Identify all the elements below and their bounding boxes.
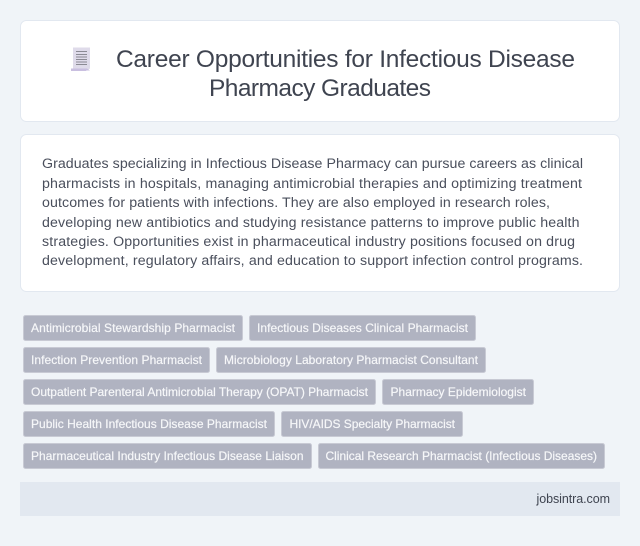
- tag: Clinical Research Pharmacist (Infectious Diseases): [318, 444, 604, 468]
- tag: Antimicrobial Stewardship Pharmacist: Antimicrobial Stewardship Pharmacist: [31, 321, 236, 335]
- tag list: career titles: [24, 316, 604, 468]
- tag: Infectious Diseases Clinical Pharmacist: [250, 316, 476, 340]
- tag: Outpatient Parenteral Antimicrobial Therapy (OPAT) Pharmacist: Outpatient Parenteral Antimicrobial Therapy (OPAT) Pharmacist: [31, 385, 369, 399]
- tag: Pharmaceutical Industry Infectious Disease Liaison: [24, 444, 312, 468]
- tag: Clinical Research Pharmacist (Infectious Diseases): Clinical Research Pharmacist (Infectious Diseases): [326, 449, 597, 463]
- tag: Antimicrobial Stewardship Pharmacist: [24, 316, 242, 340]
- tag: Infectious Diseases Clinical Pharmacist: Infectious Diseases Clinical Pharmacist: [257, 321, 469, 335]
- tag: Outpatient Parenteral Antimicrobial Therapy (OPAT) Pharmacist: [24, 380, 376, 404]
- tag: HIV/AIDS Specialty Pharmacist: HIV/AIDS Specialty Pharmacist: [290, 417, 456, 431]
- panel: header: [20, 20, 620, 122]
- footer: [20, 482, 620, 516]
- tag: Infection Prevention Pharmacist: Infection Prevention Pharmacist: [31, 353, 203, 367]
- title: Pharmacy Graduates: [209, 75, 431, 102]
- text block: summary paragraph: outcomes for patients with infections. They are also employed in research roles,: [42, 195, 550, 211]
- tag: HIV/AIDS Specialty Pharmacist: [282, 412, 462, 436]
- icon: document receipt: [71, 48, 90, 71]
- footer: jobsintra.com: [536, 492, 610, 506]
- title: Career Opportunities for Infectious Disease: [116, 46, 575, 73]
- text block: summary paragraph: [42, 156, 583, 269]
- text block: summary paragraph: development, regulatory affairs, and education to support infection control programs.: [42, 253, 583, 269]
- tag: Pharmaceutical Industry Infectious Disease Liaison: Pharmaceutical Industry Infectious Disease Liaison: [31, 449, 304, 463]
- tag: Microbiology Laboratory Pharmacist Consultant: Microbiology Laboratory Pharmacist Consultant: [224, 353, 479, 367]
- text block: summary paragraph: pharmacists in hospitals, managing antimicrobial therapies and optimizing treatment: [42, 176, 582, 192]
- text block: summary paragraph: developing new antibiotics and studying resistance patterns to improve public health: [42, 215, 580, 231]
- tag: Public Health Infectious Disease Pharmacist: [24, 412, 274, 436]
- tag: Pharmacy Epidemiologist: Pharmacy Epidemiologist: [390, 385, 527, 399]
- text block: summary paragraph: strategies. Opportunities exist in pharmaceutical industry positions focused on drug: [42, 234, 575, 250]
- title: [116, 46, 575, 102]
- tag: Microbiology Laboratory Pharmacist Consultant: [216, 348, 486, 372]
- tag: Public Health Infectious Disease Pharmacist: Public Health Infectious Disease Pharmacist: [31, 417, 268, 431]
- panel: description: [20, 134, 620, 292]
- tag: Infection Prevention Pharmacist: [24, 348, 210, 372]
- text block: summary paragraph: Graduates specializing in Infectious Disease Pharmacy can pursue careers as clinical: [42, 156, 583, 172]
- tag: Pharmacy Epidemiologist: [382, 380, 534, 404]
